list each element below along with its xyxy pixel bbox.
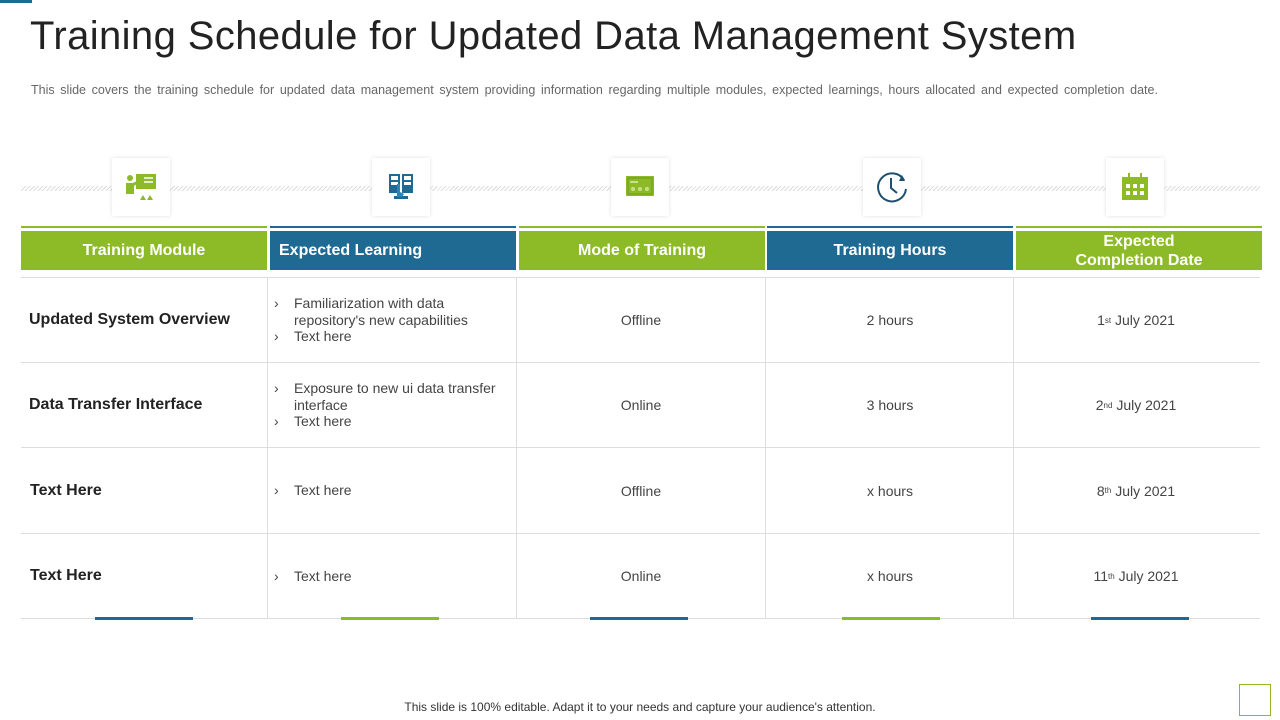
header: training hours [767,231,1013,270]
table body: Text here [294,328,352,344]
table body: Text here [294,568,352,584]
header: training hours: Training Hours [834,242,946,259]
table body: Text here [294,413,352,429]
table body: Online [621,568,661,584]
icon: presentation [112,158,170,216]
table body: 11 July 2021 [1093,568,1179,584]
table body: Familiarization with data repository's new capabilities [294,295,468,328]
table body: Online [621,397,661,413]
table body: › [274,328,279,344]
table body: › [274,295,279,311]
table body: › [274,413,279,429]
header: expected learning [270,231,516,270]
header: completion date: Completion Date [1075,252,1203,268]
icon: board [611,158,669,216]
table body: 2 July 2021 [1096,397,1176,413]
table body: 8 July 2021 [1097,482,1175,498]
header: completion date [1016,231,1262,270]
table body: 1 July 2021 [1097,312,1175,328]
footer note: This slide is 100% editable. Adapt it to your needs and capture your audience's attention. [404,700,876,714]
row 4: Text Here [30,567,102,584]
table body: st [1105,316,1111,324]
subtitle: This slide covers the training schedule for updated data management system providing information regarding multiple modules, expected learnings, hours allocated and expected completion date. [31,83,1158,97]
header: expected learning: Expected Learning [279,242,422,259]
header: mode of training: Mode of Training [578,242,706,259]
table body: › [274,482,279,498]
dashed timeline [21,186,1260,191]
table body: 2 hours [867,312,913,328]
icon: data book [372,158,430,216]
table body: nd [1104,400,1112,410]
table body: Text here [294,482,352,498]
row 3: Text Here [30,482,102,498]
corner box [1239,684,1271,716]
title: Training Schedule for Updated Data Management System [30,14,1077,58]
table body: Exposure to new ui data transfer interface [294,380,496,413]
header: completion date: Expected [1103,232,1175,250]
table body: x hours [867,568,913,584]
table body: th [1108,572,1115,580]
table body: 3 hours [867,397,913,413]
icon: clock [863,158,921,216]
table body: › [274,380,279,396]
icon: calendar [1106,158,1164,216]
row 1: Updated System Overview [29,311,230,328]
header: mode of training [519,231,765,270]
header: training module: Training Module [83,242,205,259]
header: training module [21,231,267,270]
table body: › [274,568,279,584]
row 2: Data Transfer Interface [29,396,202,413]
table body: Offline [621,312,661,328]
table body: x hours [867,482,913,498]
table body: th [1105,486,1111,495]
table body: Offline [621,482,661,498]
